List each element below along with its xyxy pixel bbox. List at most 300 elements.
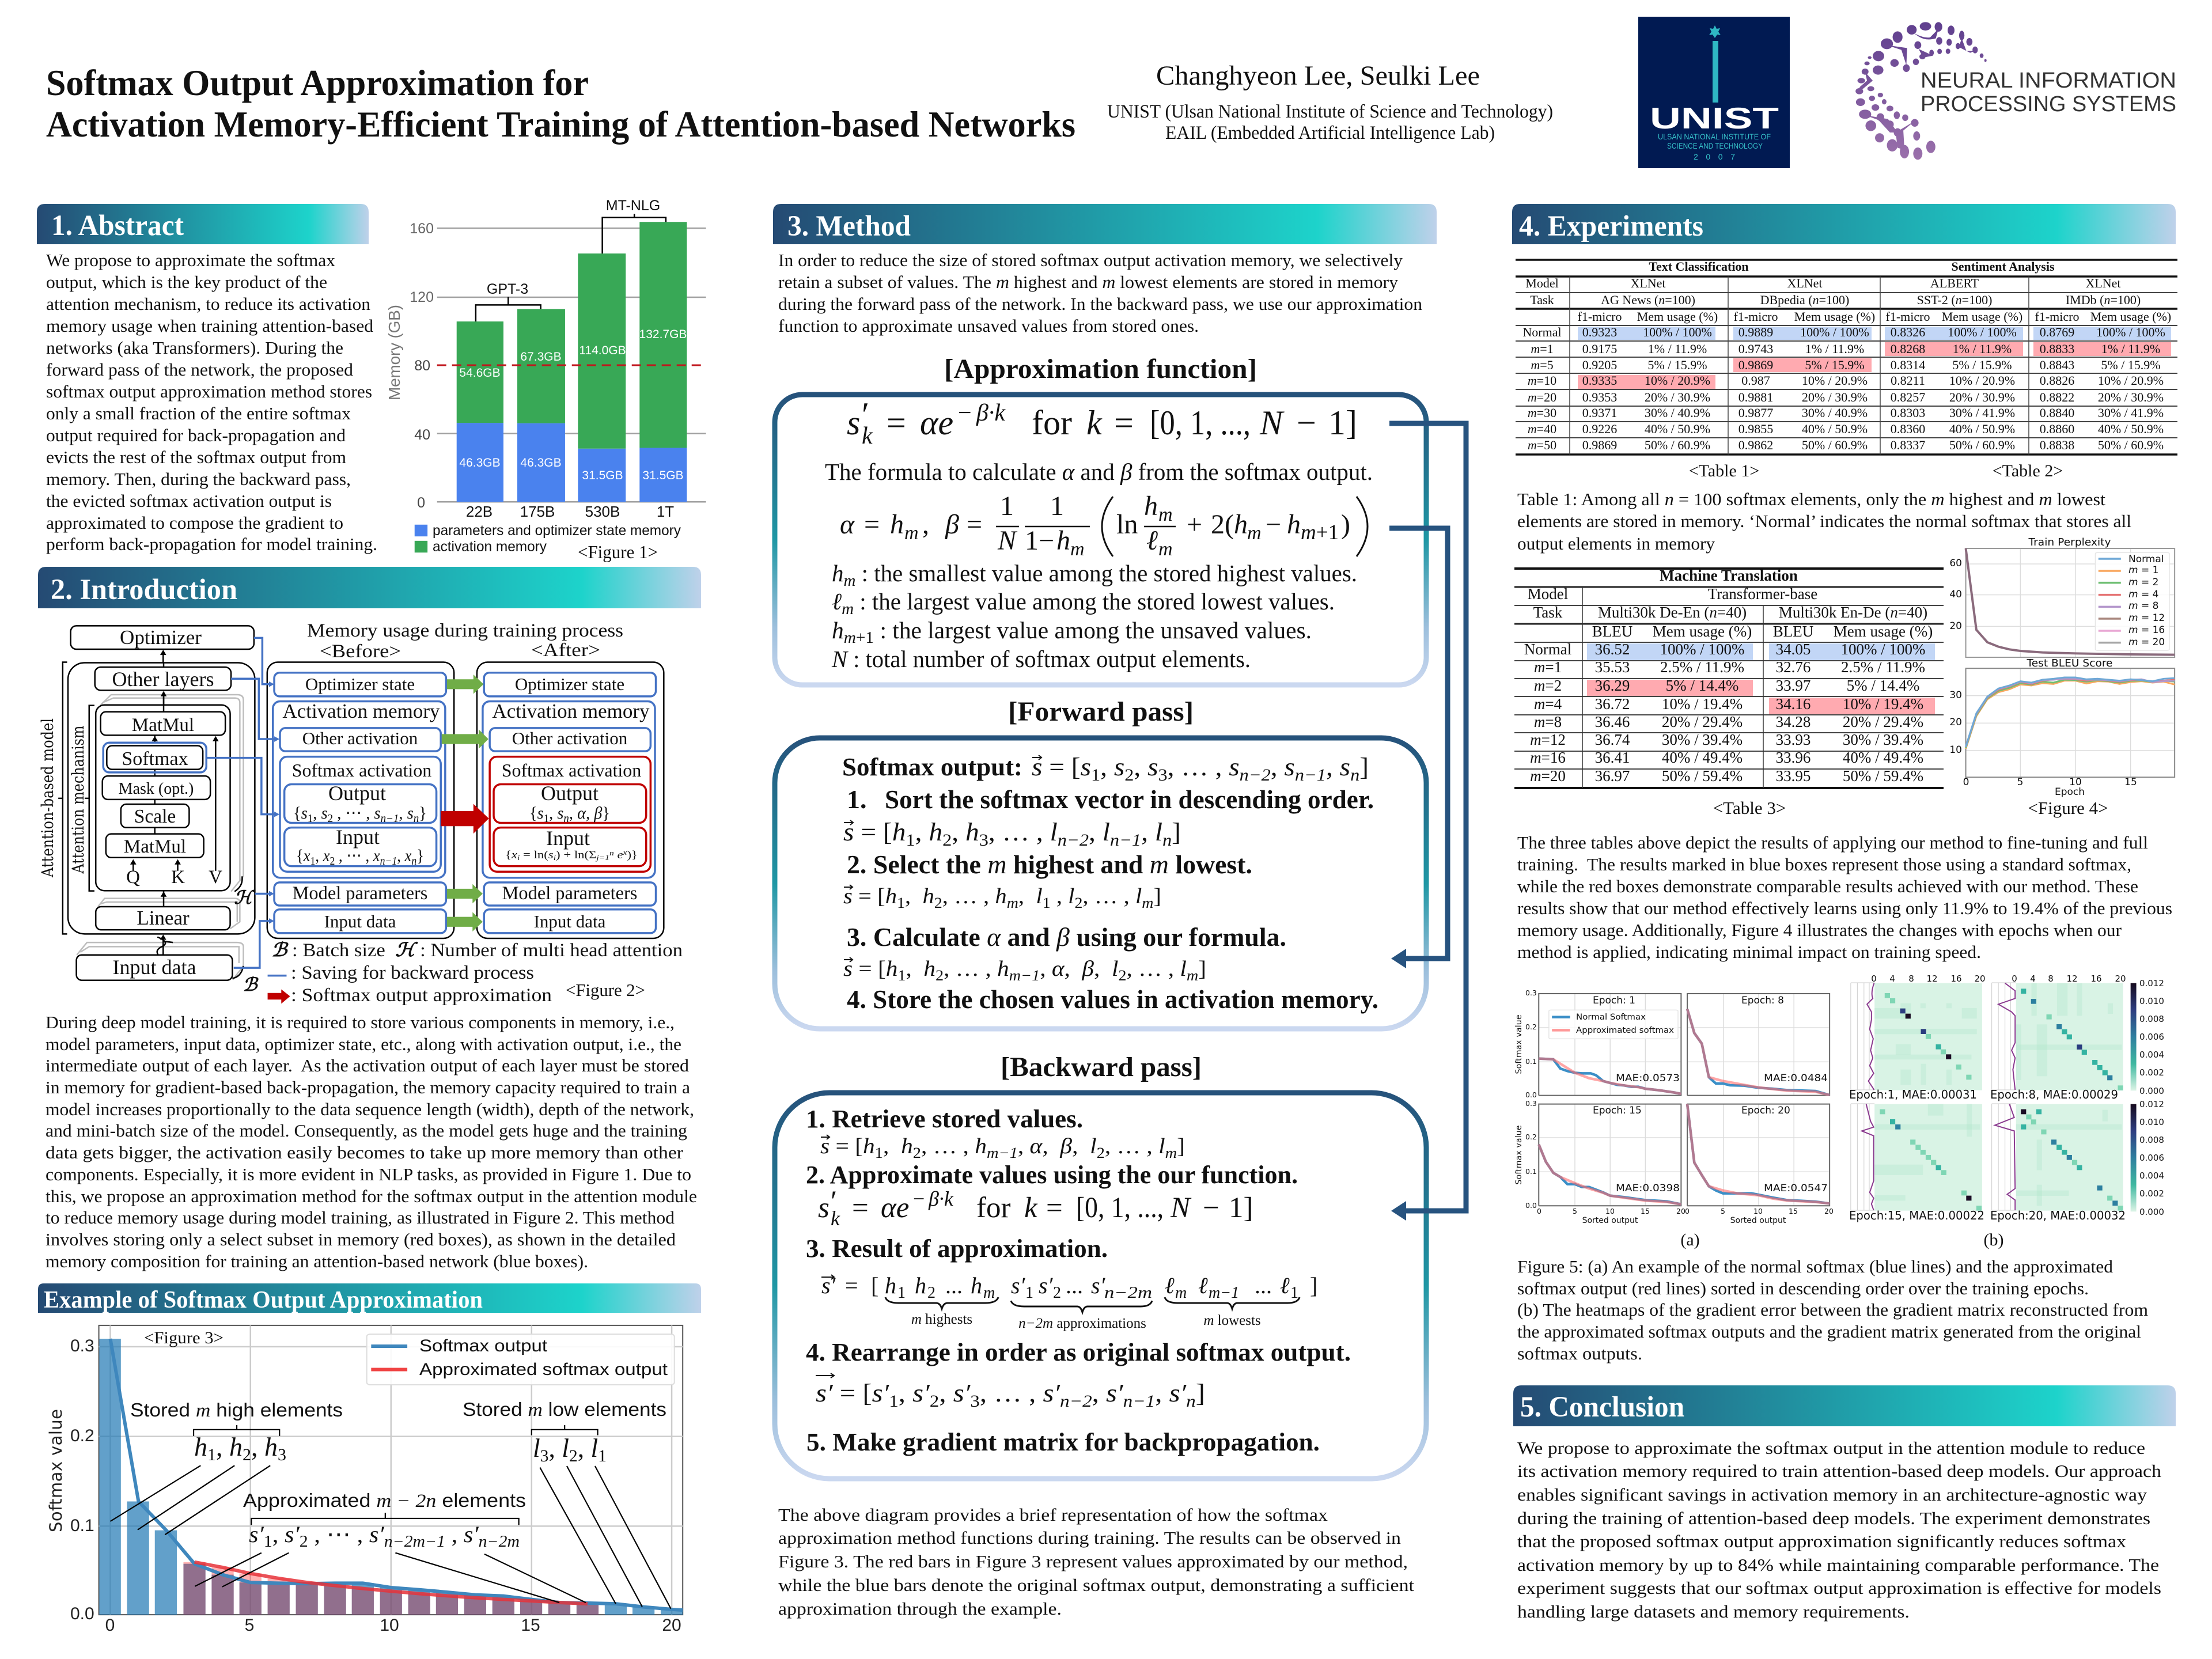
panel: method (773, 204, 1466, 1619)
text block: introduction: in memory for gradient-based back-propagation, the memory capacity required to train a (46, 1078, 690, 1097)
table: table 3: Model (1528, 585, 1568, 603)
heading: introduction (38, 567, 701, 608)
text: backward step 1: 2 (1097, 1145, 1105, 1161)
chart: figure 3 softmax bars: , (251, 1432, 264, 1461)
chart: figure 3 softmax bars: , (216, 1432, 229, 1461)
text: forward step 2: l (1068, 884, 1074, 908)
caption: figure 4: <Figure 4> (2028, 798, 2108, 818)
text block: introduction: model parameters, input data, optimizer state, etc., along with activation output, i.e., the (46, 1035, 681, 1054)
table: tables 1 and 2: m=5 (1531, 358, 1554, 372)
table: tables 1 and 2: 50% / 60.9% (1949, 438, 2015, 452)
heading: approximation function: [Approximation function] (944, 354, 1257, 384)
text: softmax output vector: Softmax output: (842, 753, 1022, 781)
text: forward step 3: , (1040, 957, 1052, 981)
diagram: figure 2 memory usage: Optimizer state (305, 674, 415, 694)
text: forward step 3: h (923, 957, 935, 981)
chart: figure 3 softmax bars: , (548, 1433, 562, 1463)
text: forward step 2: h (995, 884, 1007, 908)
text: backward step 1: l (1158, 1134, 1165, 1158)
text block: abstract: output required for back-propagation and (46, 425, 346, 445)
chart: figure 1 memory bars: 31.5GB (642, 469, 684, 482)
diagram: figure 2 memory usage: Softmax (122, 748, 188, 770)
text: forward step 1: l (1050, 818, 1058, 846)
text: forward step 2: m (1142, 895, 1153, 911)
heading: abstract (37, 204, 369, 244)
chart: figure 3 softmax bars: , (272, 1521, 285, 1547)
diagram: figure 2 memory usage: 2 (328, 812, 333, 825)
text: backward step 4: , … , (980, 1379, 1043, 1407)
table: tables 1 and 2: 0.987 (1741, 373, 1770, 388)
table: tables 1 and 2 (1516, 259, 2177, 454)
text: backward step 3: = (845, 1272, 858, 1298)
table: tables 1 and 2: m=40 (1528, 422, 1556, 436)
text: symbol definitions: m+1 (844, 628, 874, 647)
table: tables 1 and 2: 0.9323 (1582, 325, 1617, 339)
formula: approximation function: ′ (862, 396, 869, 434)
diagram: figure 2 memory usage: {s (293, 804, 308, 823)
text: backward step 3: n−2m (1104, 1284, 1152, 1302)
table: table 3: m=16 (1530, 749, 1566, 766)
text block: method summary: while the blue bars denote the original softmax output, demonstrating a sufficient (778, 1575, 1414, 1595)
text: backward step 2: 2. Approximate values using the our function. (806, 1161, 1298, 1189)
text: backward step 1: , (883, 1134, 901, 1158)
chart: figure 3 softmax bars: l (533, 1433, 540, 1463)
text: forward step 1: s = [h (843, 818, 905, 846)
text: forward step 1: n−2 (1058, 831, 1089, 850)
formula: alpha and beta: 1 (1000, 491, 1014, 521)
chart: figure 4 training curves: Test BLEU Score (2026, 657, 2113, 669)
text: backward step 3: ... (1255, 1272, 1272, 1298)
chart: figure 1 memory bars: 80 (414, 358, 430, 374)
table: table 3: 34.28 (1776, 713, 1810, 730)
table: table 3: Multi30k De-En (n=40) (1598, 604, 1747, 621)
text block: method intro: function to approximate unsaved values from stored ones. (778, 316, 1199, 336)
text block: introduction: this, we propose an approximation method for the softmax output in the attention module (46, 1187, 697, 1206)
table: tables 1 and 2: m=1 (1531, 342, 1554, 356)
table: table 3 (1514, 567, 1944, 788)
table: tables 1 and 2: 0.8211 (1891, 373, 1925, 388)
formula: alpha and beta: m (904, 522, 919, 544)
table: table 3: Transformer-base (1708, 585, 1817, 603)
diagram: figure 2 memory usage: Input (336, 825, 380, 849)
table: tables 1 and 2: 1% / 11.9% (1648, 342, 1707, 356)
chart: figure 4 training curves: 40 (1949, 589, 1962, 600)
text block: introduction: and mini-batch size of the model. Consequently, as the model gets huge and the training (46, 1121, 687, 1141)
table: tables 1 and 2: 0.9889 (1738, 325, 1773, 339)
chart: figure 3 softmax bars: s′ (285, 1521, 300, 1547)
table: tables 1 and 2: AG News (n=100) (1601, 293, 1695, 307)
text: forward step 2: 2 (1074, 895, 1082, 911)
chart: figure 4 training curves: Epoch (2055, 786, 2085, 798)
text: backward step 4: , (899, 1379, 912, 1407)
chart: figure 1 memory bars: 0 (417, 495, 425, 511)
chart: figure 3 softmax bars: 1 (207, 1445, 216, 1464)
table: table 3: 100% / 100% (1841, 641, 1925, 658)
table: table 3: 5% / 14.4% (1666, 677, 1738, 694)
text block: introduction: model increases proportionally to the data sequence length (width), depth of the network, (46, 1100, 694, 1119)
text block: abstract: memory. Then, during the backward pass, (46, 469, 351, 489)
chart: figure 5b gradient heatmaps: 0.000 (2139, 1207, 2164, 1217)
text: backward step 3: ℓ (1198, 1272, 1208, 1298)
table: tables 1 and 2: 40% / 50.9% (1645, 422, 1710, 436)
diagram: figure 2 memory usage: ℬ : Batch size ℋ : Number of multi head attention (271, 940, 683, 961)
text: forward step 1: , (1089, 818, 1103, 846)
text block: conclusion: We propose to approximate the softmax output in the attention module to reduce (1517, 1438, 2145, 1458)
formula: alpha and beta: h (1287, 509, 1301, 540)
panel: introduction (38, 567, 701, 1271)
table: tables 1 and 2: 0.9353 (1582, 390, 1617, 404)
text: backward step 3: m highests (911, 1312, 972, 1327)
text block: introduction: During deep model training, it is required to store various components in memory, i.e., (46, 1013, 675, 1032)
text: softmax output vector: 2 (1124, 766, 1134, 785)
table: tables 1 and 2: 20% / 30.9% (1802, 390, 1868, 404)
formula: alpha and beta: ℓ (1146, 525, 1158, 556)
icon: UNIST logo (1638, 17, 1790, 168)
text: backward step 1: , (1018, 1134, 1030, 1158)
heatmap side plots (1851, 983, 2016, 1210)
chart: figure 1 memory bars: 114.0GB (579, 344, 626, 357)
table: table 3: 36.41 (1595, 749, 1630, 766)
text block: method intro: during the forward pass of the network. In the backward pass, we use our approximation (778, 294, 1423, 314)
chart: figure 3 softmax bars: 2 (569, 1446, 578, 1465)
chart: figure 1 memory bars: 46.3GB (520, 456, 562, 469)
text: forward step 1: 2 (942, 831, 952, 850)
diagram: figure 2 memory usage: x (404, 846, 412, 865)
table: table 3: 33.93 (1776, 731, 1810, 748)
text: backward step 3: 2 (1053, 1284, 1061, 1302)
chart: figure 5b gradient heatmaps: 0.006 (2139, 1153, 2164, 1163)
diagram: figure 2 memory usage: Activation memory (282, 700, 440, 722)
table: table 3: 10% / 19.4% (1843, 695, 1923, 713)
text: softmax output vector: ] (1359, 753, 1369, 781)
chart: figure 4 training curves: 10 (2069, 777, 2082, 788)
chart: figure 3 softmax bars: 0.1 (70, 1516, 94, 1535)
table: table 3: Mem usage (%) (1653, 623, 1752, 640)
chart: figure 3 softmax bars: 0.3 (70, 1336, 94, 1355)
diagram: figure 2 memory usage: s (548, 849, 554, 861)
chart: figure 3 softmax bars: 0.2 (70, 1426, 94, 1445)
text: backward step 3: s′ (1039, 1272, 1054, 1298)
table: table 3: 36.52 (1595, 641, 1630, 658)
table: tables 1 and 2: f1-micro (1578, 309, 1622, 324)
text block: method intro: retain a subset of values. The m highest and m lowest elements are stored in memory (778, 272, 1399, 292)
chart: figure 5b gradient heatmaps: 4 (2030, 974, 2036, 984)
table: tables 1 and 2: 0.9335 (1582, 373, 1617, 388)
chart: figure 5a softmax per epoch: 5 (1721, 1207, 1725, 1215)
text: backward step 4: 1 (889, 1392, 899, 1411)
text: forward step 2: , … , (942, 884, 995, 908)
text: forward step 1: l (1155, 818, 1162, 846)
table: table 3: 20% / 29.4% (1662, 713, 1743, 730)
table: tables 1 and 2: Mem usage (%) (1942, 309, 2022, 324)
diagram: figure 2 memory usage: , ⋯ , (333, 804, 374, 823)
chart: figure 5b gradient heatmaps: 0.000 (2139, 1086, 2164, 1096)
diagram: figure 2 memory usage: Input (546, 827, 590, 850)
formula: alpha and beta: h (890, 509, 904, 540)
text block: table note: Table 1: Among all n = 100 softmax elements, only the m highest and m lowest (1517, 489, 2105, 509)
heading: conclusion (1513, 1385, 2176, 1426)
table: table 3: 2.5% / 11.9% (1841, 658, 1925, 676)
chart: figure 3 softmax bars: 20 (662, 1616, 681, 1635)
table: tables 1 and 2: 30% / 40.9% (1645, 406, 1710, 420)
chart: figure 4 training curves: 20 (1949, 717, 1962, 728)
table: table 3: 50% / 59.4% (1843, 767, 1923, 785)
formula: alpha and beta: h (1234, 509, 1248, 540)
text: backward step 2: = (852, 1192, 869, 1224)
chart: figure 5b gradient heatmaps: 8 (2048, 974, 2054, 984)
chart: figure 1 memory bars (385, 198, 706, 562)
text block: abstract: approximated to compose the gradient to (46, 513, 343, 533)
text: backward step 2: k (831, 1207, 840, 1230)
text: softmax output vector: s (1229, 753, 1240, 781)
text: formula caption: The formula to calculate α and β from the softmax output. (825, 459, 1373, 485)
text: softmax output vector: s (1340, 753, 1350, 781)
table: table 3: Machine Translation (1660, 567, 1798, 584)
caption: figure 5 b: (b) (1984, 1230, 2003, 1249)
chart: figure 5b gradient heatmaps: 0.010 (2139, 1117, 2164, 1127)
table: table 3: BLEU (1773, 623, 1813, 640)
text block: abstract: only a small fraction of the entire softmax (46, 403, 351, 423)
text: forward step 4: 4. Store the chosen values in activation memory. (847, 984, 1378, 1014)
diagram: figure 2 memory usage: Q (126, 867, 140, 888)
text: backward step 2: 1] (1229, 1192, 1253, 1224)
table: tables 1 and 2: m=50 (1528, 438, 1556, 452)
diagram: figure 2 memory usage: <Figure 2> (566, 980, 645, 1000)
chart: figure 1 memory bars: 160 (410, 221, 434, 237)
diagram: figure 2 memory usage: ℋ (234, 887, 255, 908)
panel: forward pass (775, 738, 1426, 1029)
table: tables 1 and 2: 0.8360 (1891, 422, 1925, 436)
table: table 3: Multi30k En-De (n=40) (1779, 604, 1927, 621)
formula: approximation function: β·k (976, 400, 1006, 426)
diagram: figure 2 memory usage: , (569, 804, 577, 823)
formula: alpha and beta: ) (1341, 509, 1350, 540)
diagram: figure 2 memory usage: Softmax activation (502, 760, 641, 781)
formula: approximation function: k (1086, 404, 1103, 442)
arrow: approximation to backward pass (1389, 423, 1466, 1221)
table: tables 1 and 2: IMDb (n=100) (2066, 293, 2141, 307)
formula: alpha and beta: m+1 (1301, 521, 1339, 544)
table: tables 1 and 2: 0.9371 (1582, 406, 1617, 420)
text: softmax output vector: s (1114, 753, 1124, 781)
text: backward step 4: s′ = [s′ (816, 1379, 887, 1407)
formula: alpha and beta: ln (1116, 509, 1138, 540)
text: forward step 1: Sort the softmax vector in descending order. (885, 785, 1374, 814)
chart: figure 5b gradient heatmaps (1849, 974, 2164, 1222)
text block: results discussion: training. The results marked in blue boxes represent those using a standard softmax, (1517, 854, 2131, 874)
text: symbol definitions: : the largest value among the unsaved values. (874, 617, 1312, 643)
formula: alpha and beta: h (1056, 525, 1070, 556)
chart: figure 3 softmax bars: 10 (380, 1616, 399, 1635)
text: backward step 3: 1 (897, 1284, 906, 1302)
diagram: figure 2 memory usage: {s (529, 804, 544, 823)
chart: figure 3 softmax bars: , (445, 1521, 464, 1547)
formula: approximation function: = (1114, 404, 1134, 442)
text: backward step 3: m (1175, 1284, 1187, 1302)
diagram: figure 2 memory usage: i (517, 853, 520, 862)
diagram: figure 2 memory usage: , (313, 804, 321, 823)
diagram: figure 2 memory usage: <Before> (320, 641, 401, 662)
chart: figure 4 training curves: 5 (2017, 777, 2023, 788)
chart: figure 3 softmax bars: 2 (300, 1533, 308, 1551)
chart: figure 5b gradient heatmaps: 0 (2012, 974, 2017, 984)
icon: NeurIPS logo: NEURAL INFORMATION (1921, 69, 2176, 93)
text block: figure 5 caption (1517, 1256, 2148, 1363)
heading: example (38, 1283, 701, 1313)
text: forward step 3: , … , (944, 957, 997, 981)
text: backward step 2: αe (881, 1192, 909, 1224)
text: forward step 1 (843, 785, 1374, 850)
table: tables 1 and 2: 0.8314 (1891, 358, 1925, 372)
diagram: figure 2 memory usage: V (209, 867, 222, 888)
formula: alpha and beta: = (967, 509, 982, 540)
chart: figure 1 memory bars: Memory (GB) (385, 305, 403, 400)
panel: backward pass (775, 1093, 1426, 1479)
chart: figure 3 softmax bars: 1 (598, 1446, 607, 1465)
table: table 3: 35.53 (1595, 658, 1630, 676)
chart: figure 4 training curves: m = 1 (2128, 565, 2158, 576)
table: tables 1 and 2: m=20 (1528, 390, 1556, 404)
text block: abstract: We propose to approximate the softmax (46, 250, 336, 270)
text: forward step 1: , (952, 818, 965, 846)
text: forward step 2: m (1007, 895, 1018, 911)
table: tables 1 and 2: 0.9881 (1738, 390, 1773, 404)
icon: NeurIPS logo: PROCESSING SYSTEMS (1921, 92, 2176, 116)
text block: results discussion: memory usage. Additionally, Figure 4 illustrates the changes with epochs when our (1517, 920, 2122, 940)
text: backward step 4: n−2 (1060, 1392, 1092, 1411)
text: backward step 1: , … , (921, 1134, 975, 1158)
table: table 3: Normal (1524, 641, 1571, 658)
text: forward step 3: h (997, 957, 1009, 981)
chart: figure 5a softmax per epoch: 0.3 (1525, 988, 1537, 997)
table: tables 1 and 2: 0.9869 (1738, 358, 1773, 372)
text block: method intro: In order to reduce the size of stored softmax output activation memory, we selectively (778, 250, 1403, 270)
text: backward step 2: − (1203, 1192, 1219, 1224)
table: tables 1 and 2: 10% / 20.9% (1645, 373, 1710, 388)
chart: figure 5b gradient heatmaps: Epoch:1, MAE:0.00031 (1849, 1088, 1977, 1101)
diagram: figure 2 memory usage: Optimizer (120, 626, 202, 649)
chart: figure 5a softmax per epoch: 0.2 (1525, 1132, 1537, 1141)
formula: alpha and beta: N (997, 525, 1018, 556)
text: backward step 3: h (915, 1272, 926, 1298)
table: tables 1 and 2: 0.8268 (1891, 342, 1925, 356)
text block: abstract: forward pass of the network, the proposed (46, 359, 353, 380)
table: tables 1 and 2: 0.9743 (1738, 342, 1773, 356)
chart: figure 3 softmax bars: Stored m low elements (463, 1399, 666, 1421)
text block: introduction: intermediate output of each layer. As the activation output of each layer must be stored (46, 1056, 689, 1075)
text: symbol definitions: ℓ (832, 588, 842, 615)
table: tables 1 and 2: Normal (1522, 325, 1562, 339)
chart: figure 3 softmax bars: h (264, 1432, 278, 1461)
text block: conclusion: activation memory by up to 84% while maintaining comparable performance. The (1517, 1555, 2159, 1575)
table: tables 1 and 2: 10% / 20.9% (1802, 373, 1868, 388)
chart: figure 3 softmax bars: s′ (464, 1521, 479, 1547)
text: forward step 2: 2. Select the m highest and m lowest. (847, 850, 1252, 879)
table: tables 1 and 2: 5% / 15.9% (1952, 358, 2012, 372)
diagram: figure 2 memory usage: : Softmax output approximation (291, 985, 552, 1006)
authors and affiliations: UNIST (Ulsan National Institute of Science and Technology) (1107, 101, 1553, 122)
chart: figure 3 softmax bars: Approximated m − 2n elements (243, 1490, 526, 1512)
text: backward step 3: ℓ (1280, 1272, 1290, 1298)
chart: figure 3 softmax bars: 15 (521, 1616, 540, 1635)
chart: figure 5a softmax per epoch: Softmax value (1514, 1126, 1524, 1184)
table: tables 1 and 2: XLNet (1787, 276, 1823, 290)
table: tables 1 and 2: DBpedia (n=100) (1760, 293, 1849, 307)
chart: figure 5b gradient heatmaps: Epoch:20, MAE:0.00032 (1990, 1209, 2126, 1222)
table: tables 1 and 2: f1-micro (2035, 309, 2079, 324)
chart: figure 3 softmax bars: 1 (264, 1533, 272, 1551)
diagram: figure 2 memory usage: MatMul (124, 836, 186, 857)
formula: alpha and beta: , (922, 509, 929, 540)
authors and affiliations: EAIL (Embedded Artificial Intelligence Lab) (1165, 123, 1495, 143)
chart: figure 4 training curves: m = 8 (2128, 600, 2158, 612)
chart: figure 3 softmax bars: 0.0 (70, 1604, 94, 1623)
diagram: figure 2 memory usage: n (411, 855, 416, 868)
text: backward step 3: ℓ (1165, 1272, 1175, 1298)
table: tables 1 and 2: ALBERT (1930, 276, 1979, 290)
text: backward step 4: ] (1196, 1379, 1205, 1407)
text block: conclusion: during the training of attention-based deep models. The experiment demonstrates (1517, 1508, 2150, 1528)
chart: figure 5b gradient heatmaps: 0.002 (2139, 1067, 2164, 1078)
chart: figure 1 memory bars: 120 (410, 289, 434, 305)
formula: alpha and beta: h (1144, 491, 1158, 521)
chart: figure 5b gradient heatmaps: 0.012 (2139, 978, 2164, 988)
diagram: figure 2 memory usage: <After> (531, 640, 600, 661)
text: forward step 3: , (906, 957, 923, 981)
text block: figure 5 caption: (b) The heatmaps of the gradient error between the gradient matrix reconstructed from (1517, 1300, 2148, 1320)
text: forward step 1: h (965, 818, 979, 846)
chart: figure 1 memory bars: 1T (657, 503, 674, 520)
heading: forward pass: [Forward pass] (1008, 696, 1194, 727)
caption: table 2: <Table 2> (1993, 461, 2063, 480)
text: backward step 3: s′ (1011, 1272, 1026, 1298)
text block: results discussion: The three tables above depict the results of applying our method to fine-tuning and full (1517, 832, 2148, 853)
text: backward step 2: ′ (831, 1185, 837, 1218)
text: softmax output vector: , (1271, 753, 1284, 781)
caption: figure 5 a: (a) (1680, 1230, 1700, 1249)
chart: figure 5b gradient heatmaps: 0.010 (2139, 996, 2164, 1006)
chart: figure 5a softmax per epoch: 0.3 (1525, 1099, 1537, 1108)
diagram: figure 2 memory usage: n (414, 812, 419, 825)
chart: figure 5a softmax per epoch: Sorted output (1730, 1216, 1786, 1225)
chart: figure 3 softmax bars: n−2m (479, 1533, 520, 1551)
diagram: figure 2 memory usage: 2 (330, 855, 335, 868)
table: table 3: 5% / 14.4% (1847, 677, 1919, 694)
text: backward step 3: m lowests (1203, 1313, 1261, 1328)
text block: results discussion: method is applied, indicating minimal impact on training speed. (1517, 942, 1981, 962)
text: backward step 4: s′ (953, 1379, 971, 1407)
chart: figure 5a softmax per epoch: 0 (1685, 1207, 1690, 1215)
icon: UNIST logo: 2 0 0 7 (1694, 152, 1735, 161)
chart: figure 3 softmax bars: h (194, 1432, 207, 1461)
table: table 3: m=12 (1530, 731, 1566, 748)
chart: figure 3 softmax bars (46, 1325, 683, 1635)
text: backward step 1: , … , (1105, 1134, 1158, 1158)
chart: figure 5a softmax per epoch: Sorted output (1582, 1216, 1638, 1225)
text: forward step 3: m−1 (1009, 967, 1040, 984)
table: table 3: 34.05 (1776, 641, 1810, 658)
chart: figure 4 training curves: 20 (1949, 620, 1962, 632)
table: table 3: m=4 (1534, 695, 1562, 713)
text block: introduction: memory composition for training an attention-based network (blue boxes). (46, 1252, 588, 1271)
text: backward step 3: 2 (927, 1284, 935, 1302)
text block: method summary: approximation through the example. (778, 1599, 1062, 1619)
table: tables 1 and 2: 100% / 100% (2096, 325, 2165, 339)
text: softmax output vector: , … , (1168, 753, 1229, 781)
text block: figure 5 caption: the approximated softmax outputs and the gradient matrix generated from the original (1517, 1321, 2141, 1342)
diagram: figure 2 memory usage: Linear (137, 907, 190, 929)
table: table 3: 34.16 (1776, 695, 1810, 713)
